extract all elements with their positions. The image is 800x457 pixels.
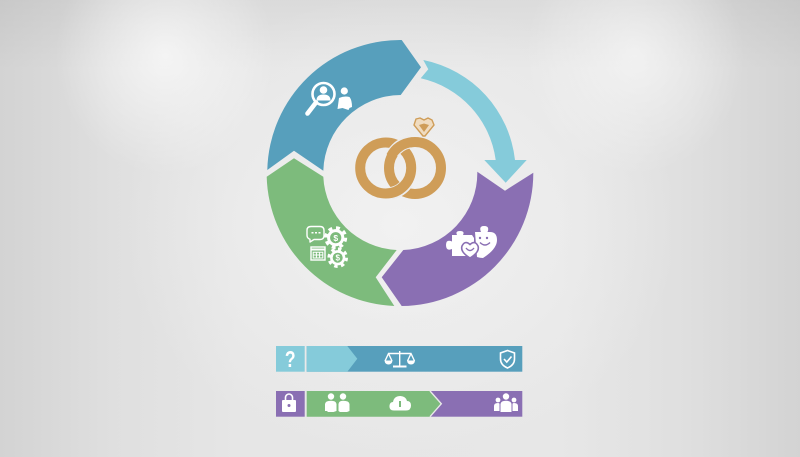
segment: green arrow (267, 158, 397, 306)
box: question mark: ? (285, 347, 296, 373)
icon: magnifier and person (308, 83, 352, 114)
icon: scales (384, 351, 415, 366)
icon: group of people (494, 393, 518, 412)
icon: two people (325, 393, 350, 412)
box: lock (276, 391, 305, 417)
segment: purple arrow (382, 172, 533, 306)
icon: heart diamond (414, 118, 434, 136)
bar segment: purple (430, 391, 522, 417)
icon: chat, calendar and gears (307, 226, 347, 266)
gear lower: $ (335, 254, 340, 263)
dots (312, 232, 320, 234)
bar segment: blue (307, 346, 522, 372)
icon: wedding rings (360, 118, 441, 194)
bar 1 (276, 346, 522, 373)
segment: light blue arrow (421, 60, 527, 183)
bar 2 (276, 391, 522, 417)
bar segment: green chevron (307, 391, 441, 417)
gear upper: $ (333, 233, 338, 243)
icon: calendar (311, 247, 325, 260)
box: question mark (276, 346, 305, 373)
cycle diagram (267, 40, 533, 306)
icon: puzzle pieces with hearts (446, 226, 497, 258)
bar segment: light blue chevron (307, 346, 357, 372)
segment: blue arrow (267, 40, 421, 171)
icon: shield check (500, 350, 514, 368)
icon: cloud upload (389, 396, 411, 410)
